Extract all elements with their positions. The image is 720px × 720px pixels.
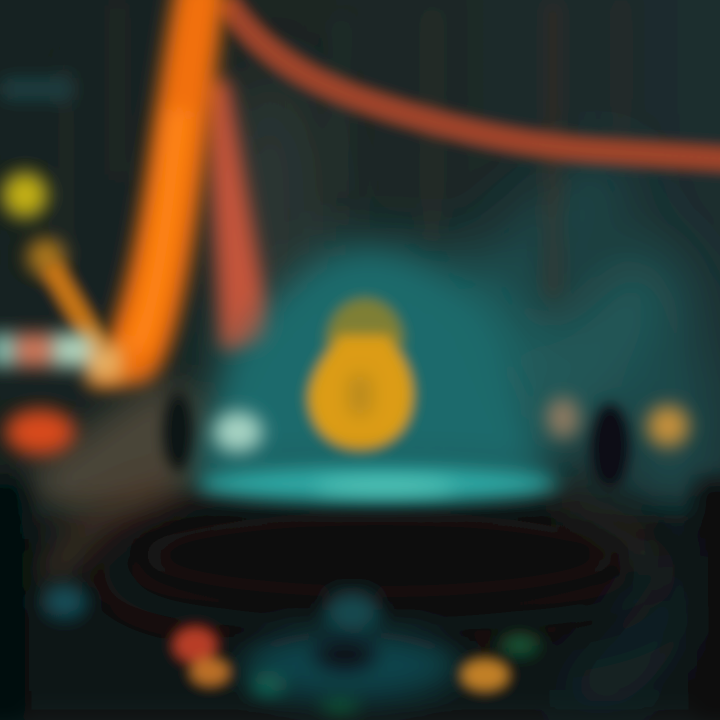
button: red-orange — [173, 627, 230, 686]
padlock: keyhole — [348, 374, 372, 416]
curve highlight — [135, 110, 180, 350]
dot: yellow — [3, 173, 47, 217]
red-orange blob — [6, 410, 74, 454]
light spot: pale orange — [547, 398, 579, 438]
curve: red descending line — [225, 0, 720, 160]
background — [0, 0, 720, 560]
button: amber — [461, 659, 509, 691]
dark side left — [0, 480, 25, 720]
console right rim — [560, 500, 655, 575]
background glow: teal haze — [210, 70, 720, 520]
console brown rim — [50, 485, 170, 580]
lower right teal haze — [560, 550, 685, 712]
line: amber diagonal — [50, 265, 100, 350]
faint label smudge top left — [0, 78, 72, 100]
button: green — [500, 636, 540, 654]
padlock: shackle — [326, 298, 404, 345]
striped bar — [0, 334, 122, 381]
curve: large orange rising line — [88, 0, 226, 385]
console body haze left — [30, 385, 210, 540]
teal knob — [324, 592, 380, 632]
dot: amber — [28, 239, 64, 275]
glow bar highlight — [315, 478, 455, 494]
lower console — [0, 515, 720, 720]
dark console panel — [90, 497, 670, 630]
teal glow bar — [198, 466, 558, 502]
teal spot left — [43, 586, 87, 618]
teal dome — [195, 255, 555, 490]
background vertical streaks — [60, 0, 627, 300]
light spot: amber — [648, 406, 688, 446]
dark side right — [695, 480, 720, 720]
teal lower glow — [240, 630, 460, 700]
padlock: body — [308, 335, 413, 450]
post: dark right — [590, 403, 630, 487]
button: bottom green — [322, 699, 358, 713]
post: dark left — [162, 392, 194, 472]
lower base — [0, 560, 720, 720]
button: teal green — [252, 675, 284, 695]
light spot: white — [214, 412, 262, 452]
bar: red diagonal — [205, 80, 272, 350]
dark centre button — [315, 641, 375, 669]
dark console panel core — [140, 513, 620, 597]
